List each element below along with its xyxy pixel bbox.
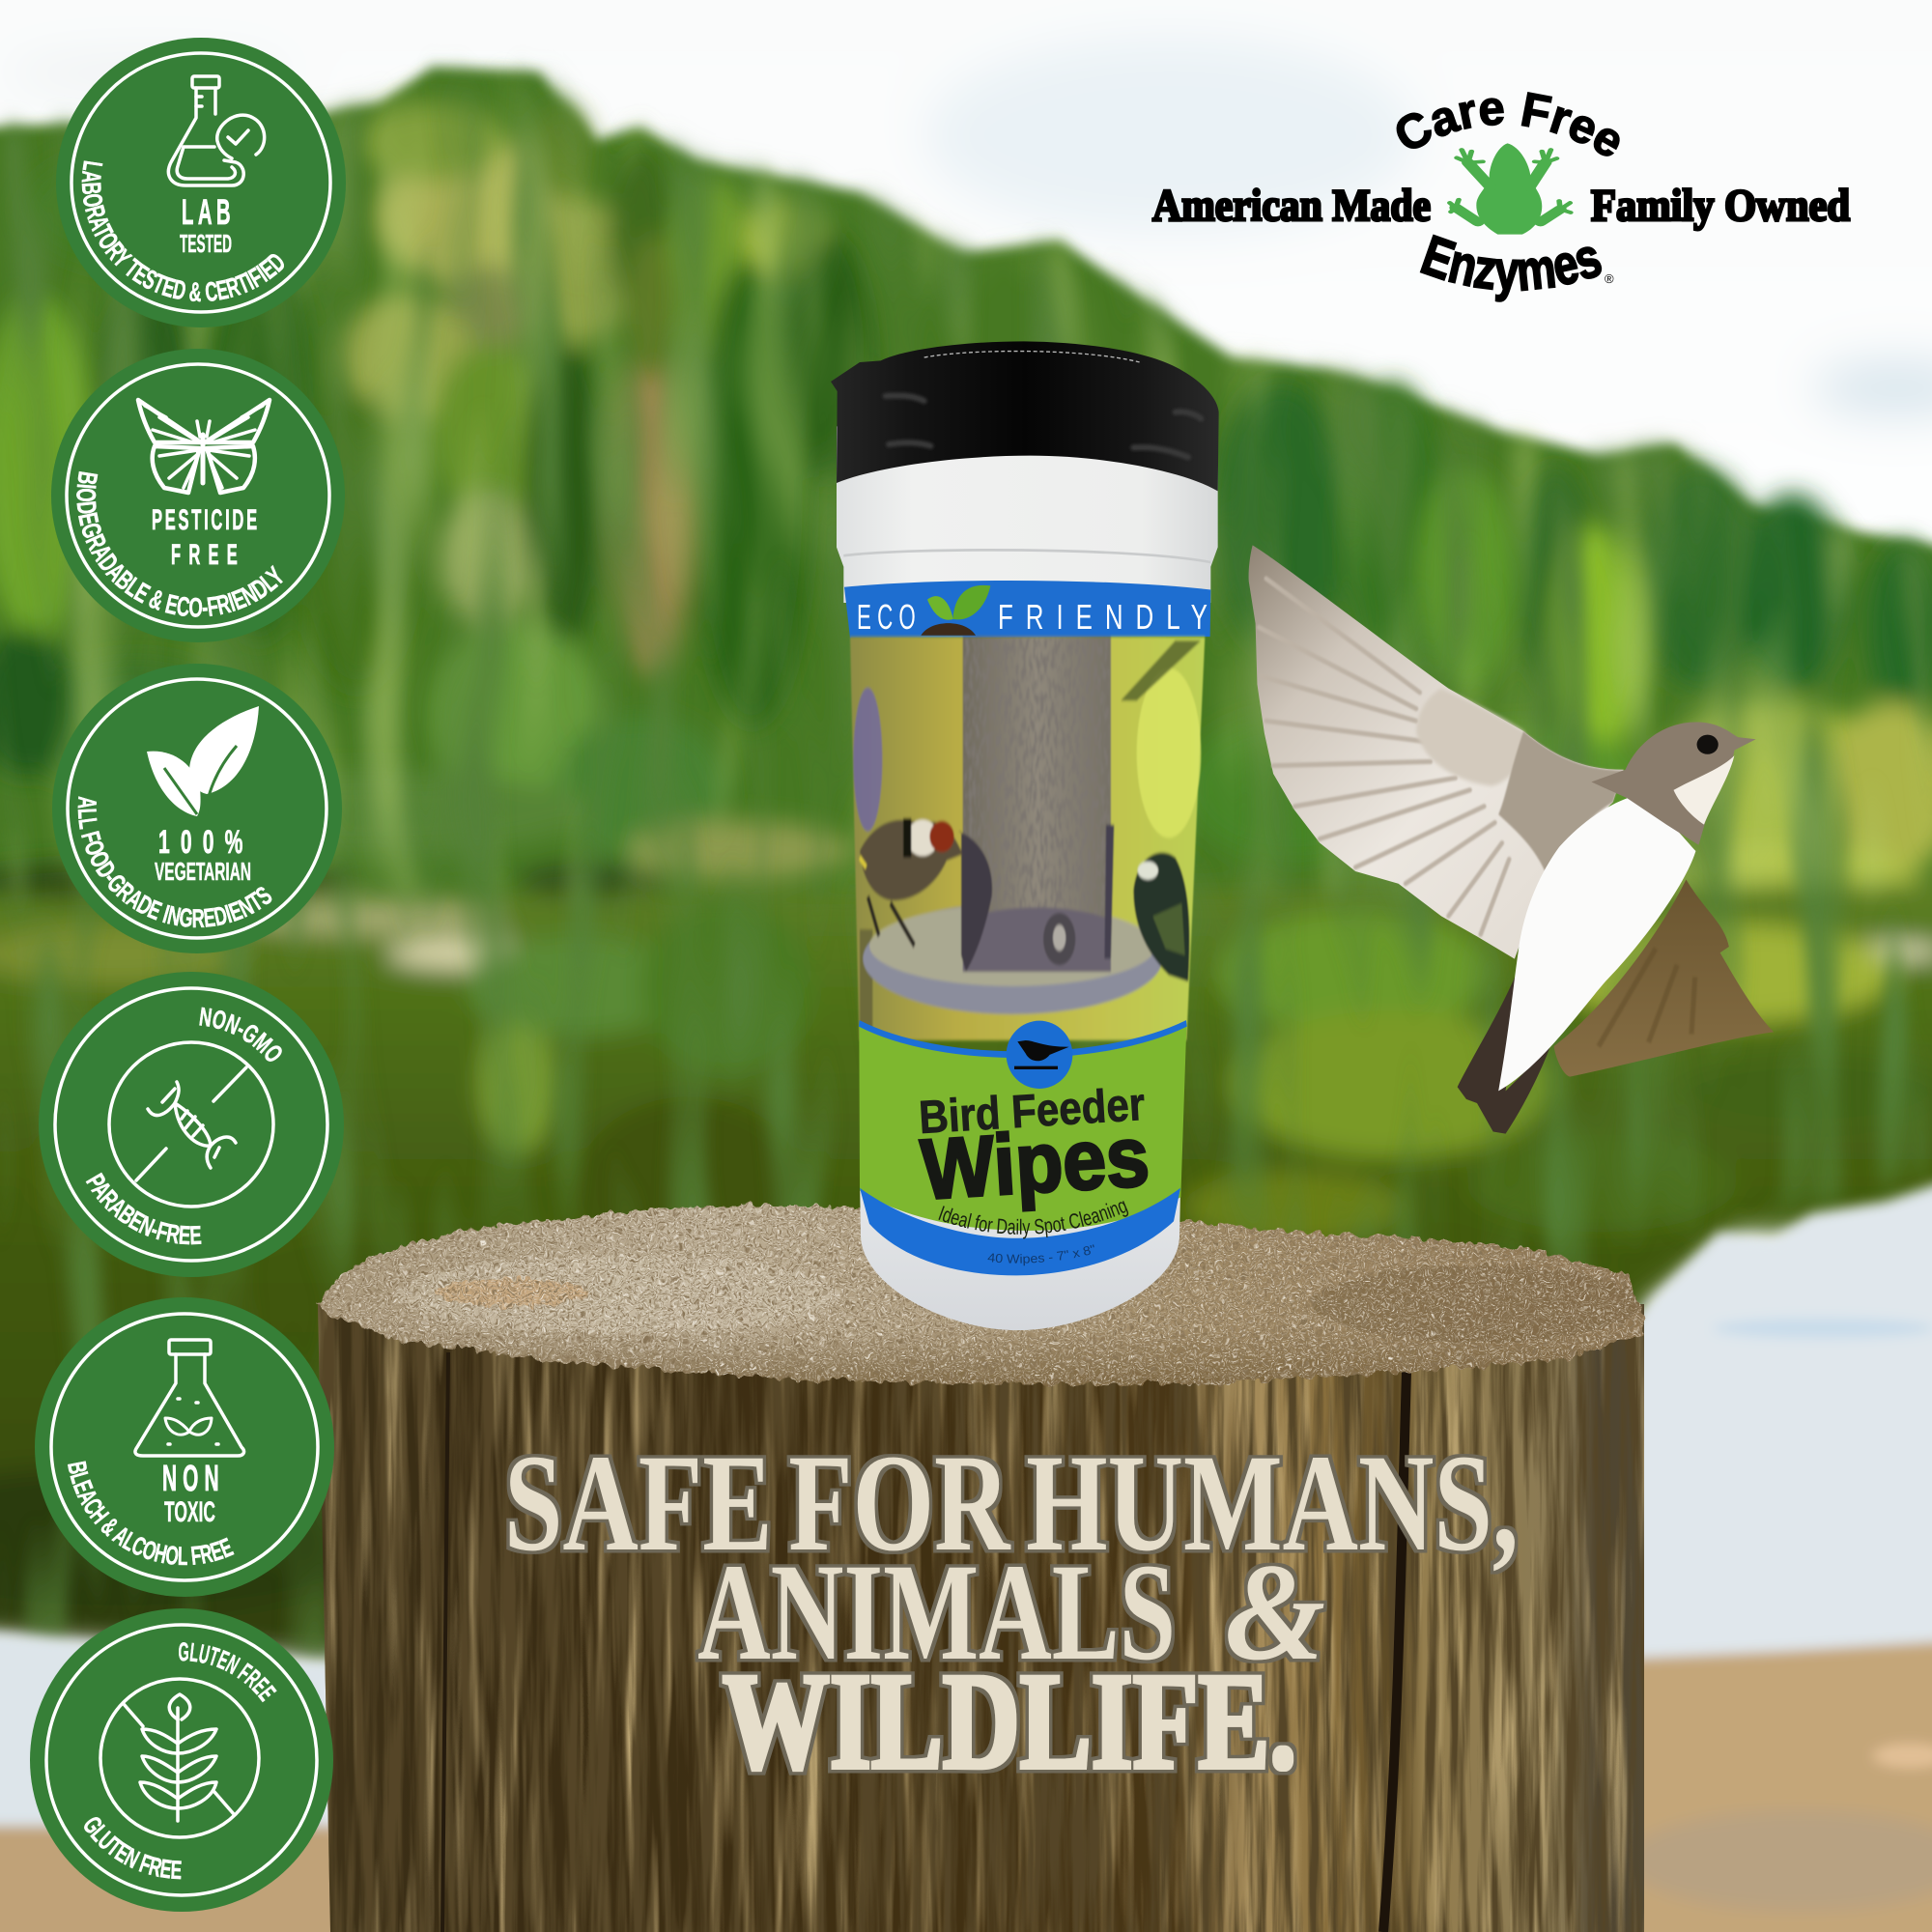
lower blue band — [860, 1188, 1180, 1275]
label: bird feeder wipes: Wipes — [919, 1108, 1151, 1217]
tail — [1458, 965, 1550, 1134]
product: bird feeder wipes canister — [831, 341, 1220, 1330]
stump side — [309, 1294, 1652, 1932]
label: bird feeder wipes: Bird Feeder — [918, 1079, 1147, 1144]
text: arc caption: LABORATORY TESTED & CERTIFIED — [81, 160, 284, 301]
bird emblem — [1007, 1021, 1072, 1089]
headline: safe for humans, animals and wildlife: WILDLIFE. — [723, 1645, 1296, 1799]
label photo — [850, 637, 1205, 1040]
body — [1498, 798, 1695, 1091]
blue stripe — [859, 1023, 1186, 1055]
text: vegetarian: VEGETARIAN — [155, 857, 251, 886]
text: free: FREE — [171, 539, 245, 571]
lake sky reflection and shore — [0, 1168, 1932, 1932]
text: top arc: GLUTEN FREE — [178, 1637, 281, 1706]
label: eco friendly — [857, 598, 1220, 637]
text: bottom arc: GLUTEN FREE — [77, 1811, 183, 1885]
text: paraben-free arc: PARABEN-FREE — [85, 1173, 201, 1244]
label: wipes count: 40 Wipes - 7" x 8" — [987, 1244, 1094, 1265]
badge: non toxic — [35, 1297, 334, 1597]
goldfinch on feeder — [860, 818, 963, 946]
wing feathers — [1259, 579, 1509, 934]
text: toxic: TOXIC — [164, 1496, 215, 1528]
icon: flask with leaves — [135, 1340, 244, 1456]
headline: safe for humans, animals and wildlife: & — [1225, 1536, 1325, 1690]
badge: 100% vegetarian — [52, 664, 342, 953]
stump top surface — [309, 1198, 1662, 1391]
wing shoulder — [1498, 731, 1624, 871]
label: ideal for daily spot cleaning: Ideal for Daily Spot Cleaning — [939, 1201, 1128, 1238]
brand logo: Care Free Enzymes — [1152, 80, 1850, 303]
throat — [1673, 755, 1734, 825]
logo: care free: Care Free — [1397, 92, 1620, 156]
label: eco friendly: FRIENDLY — [998, 598, 1220, 637]
headline: safe for humans, animals and wildlife — [504, 1427, 1519, 1799]
headline: safe for humans, animals and wildlife: SAFE FOR HUMANS, — [504, 1427, 1519, 1580]
logo: enzymes: Enzymes — [1420, 234, 1602, 302]
icon: leaves — [147, 706, 259, 816]
label blue band — [844, 581, 1210, 638]
eye — [1697, 735, 1719, 754]
far wing feathers — [1599, 949, 1695, 1046]
canister shoulder — [837, 426, 1218, 603]
icon: flask with check — [168, 76, 265, 185]
logo: frog — [1450, 143, 1571, 235]
icon: wheat with slash — [124, 1694, 234, 1821]
far wing — [1554, 879, 1774, 1077]
text: non-gmo arc: NON-GMO — [199, 1007, 282, 1062]
logo: registered mark: ® — [1605, 271, 1614, 286]
text: arc caption: ALL FOOD-GRADE INGREDIENTS — [77, 796, 272, 927]
badge: gluten free — [30, 1608, 333, 1912]
badge: non-GMO — [39, 972, 344, 1277]
black lid — [831, 341, 1219, 491]
feeder seed tube — [963, 637, 1111, 970]
text: arc caption: BIODEGRADABLE & ECO-FRIENDLY — [76, 471, 283, 617]
text: arc caption: BLEACH & ALCOHOL FREE — [68, 1461, 234, 1565]
headline: safe for humans, animals and wildlife: ANIMALS — [697, 1536, 1176, 1690]
text: tested: TESTED — [180, 229, 232, 258]
near wing — [1249, 545, 1624, 959]
shoulder groove — [843, 550, 1210, 562]
icon: butterfly — [138, 400, 270, 493]
badge: lab tested — [56, 38, 346, 327]
text: pesticide: PESTICIDE — [152, 504, 260, 536]
wing coverts — [1416, 689, 1526, 786]
text: non: NON — [162, 1459, 225, 1499]
great tit on feeder — [1133, 852, 1189, 981]
text: 100%: 100% — [158, 824, 254, 861]
icon: DNA with slash — [136, 1067, 246, 1180]
logo: american made: American Made — [1152, 181, 1431, 231]
leaf logo — [921, 585, 990, 636]
logo: family owned: Family Owned — [1591, 181, 1850, 231]
text: lab: LAB — [182, 193, 235, 233]
canister white base — [860, 1178, 1180, 1330]
tree stump — [309, 1198, 1662, 1932]
green label panel — [859, 1025, 1186, 1231]
label: eco friendly: ECO — [857, 599, 922, 637]
head and neck band — [1591, 722, 1756, 845]
bird in flight — [1249, 545, 1774, 1134]
feeder tray — [863, 903, 1162, 1014]
badge: pesticide free — [51, 349, 345, 642]
